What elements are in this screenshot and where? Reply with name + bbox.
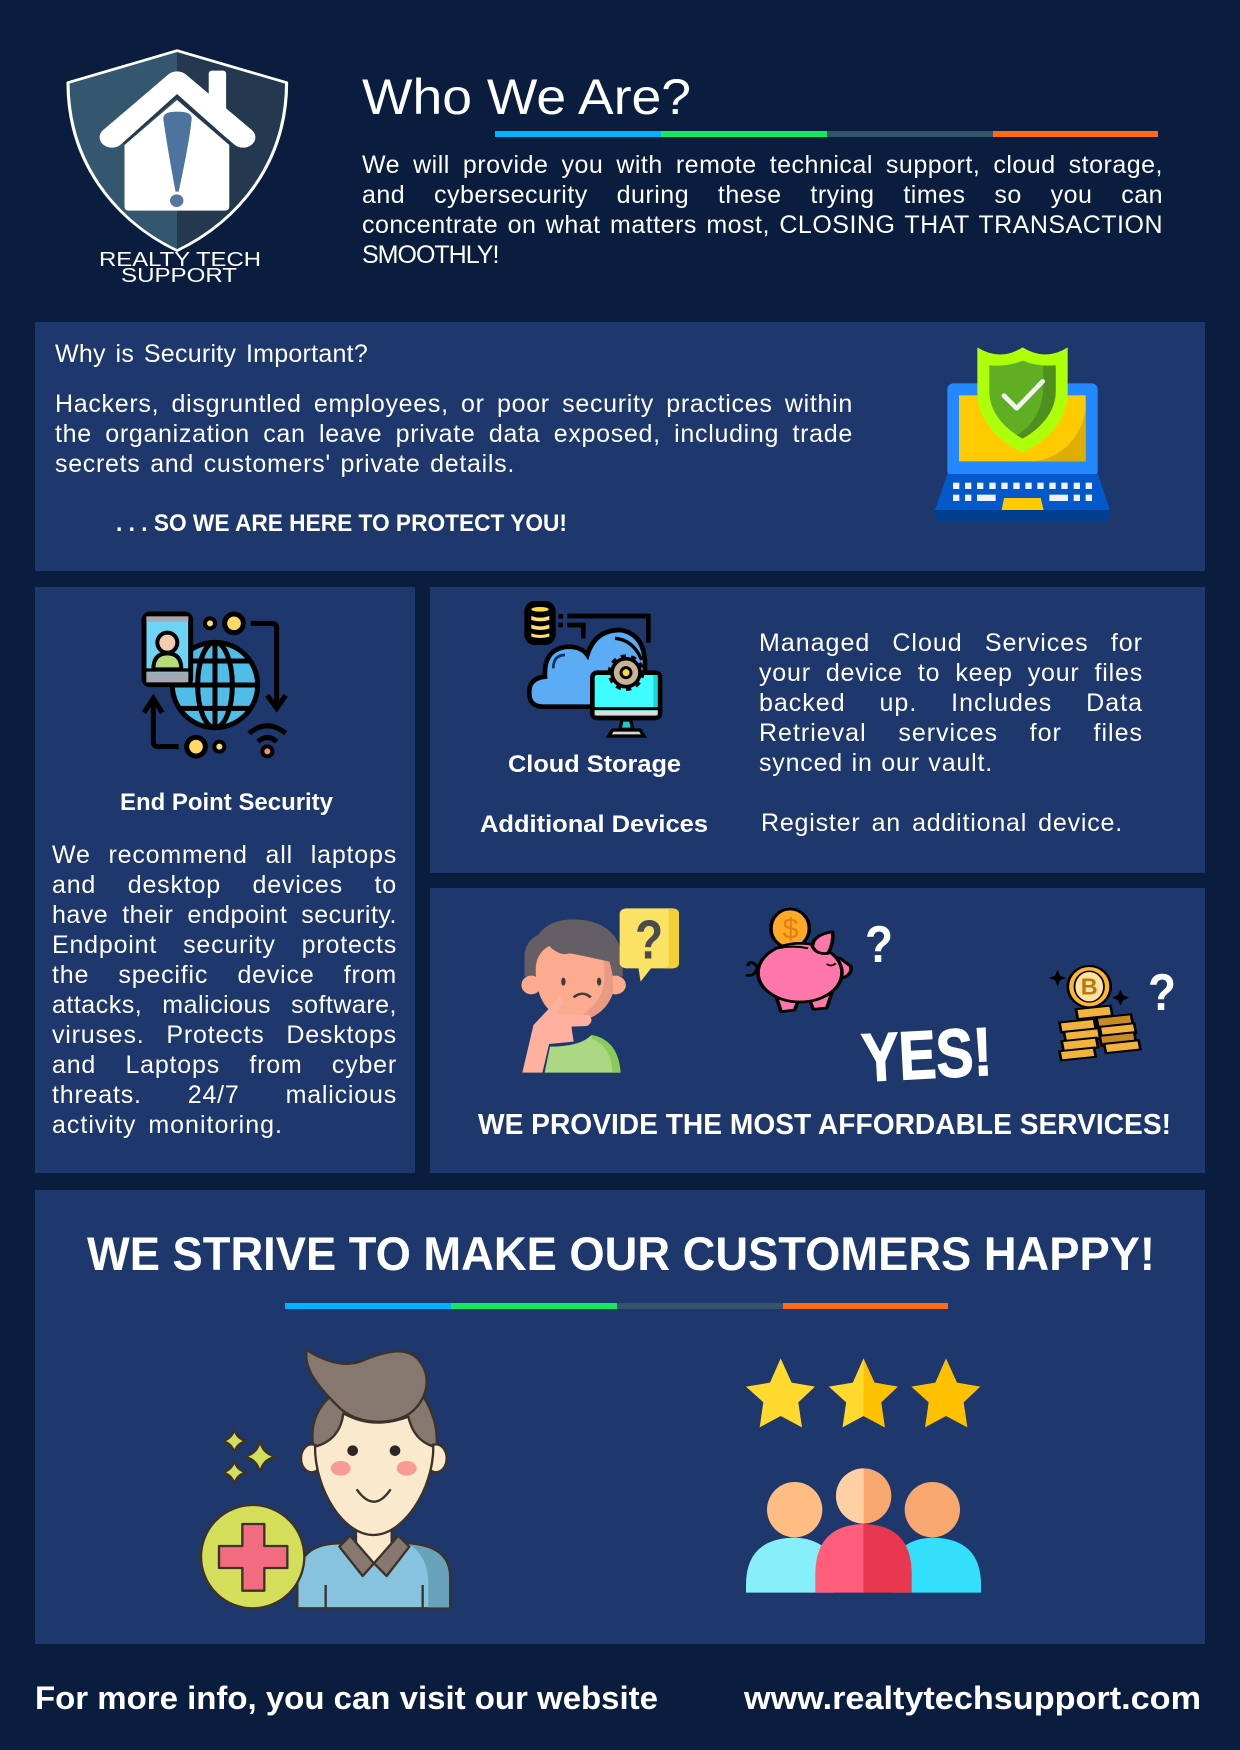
icon: bitcoin and gold bars: B xyxy=(1081,974,1098,1000)
end point security text block xyxy=(52,841,397,1139)
end point security text block: threats. 24/7 malicious xyxy=(52,1081,397,1109)
footer xyxy=(35,1680,1201,1716)
security text block: the organization can leave private data exposed, including trade xyxy=(55,420,853,448)
icon: happy man with medical badge xyxy=(201,1350,450,1608)
logo: realty tech support shield: REALTY TECH xyxy=(99,249,261,271)
end point security text block: We recommend all laptops xyxy=(52,841,397,869)
question mark: piggy bank: ? xyxy=(865,916,893,974)
colour divider bar xyxy=(495,131,1158,137)
intro text block xyxy=(362,151,1163,269)
heading: why is security important: Why is Security Important? xyxy=(55,340,368,368)
intro text block: concentrate on what matters most, CLOSING THAT TRANSACTION xyxy=(362,211,1163,239)
heading: additional devices: Additional Devices xyxy=(480,811,708,838)
icon: laptop with shield xyxy=(935,347,1110,521)
footer text: website url: www.realtytechsupport.com xyxy=(743,1680,1201,1716)
icon: cloud storage xyxy=(527,603,660,736)
end point security text block: Endpoint security protects xyxy=(52,931,397,959)
cloud storage text block: your device to keep your files xyxy=(759,659,1143,687)
logo: realty tech support shield: SUPPORT xyxy=(121,265,237,287)
additional devices text: Register an additional device. xyxy=(761,809,1123,837)
icon: bitcoin and gold bars xyxy=(1050,966,1140,1060)
cloud storage text block xyxy=(759,629,1143,777)
heading: end point security: End Point Security xyxy=(120,789,334,816)
icon: piggy bank with coin xyxy=(746,909,851,1012)
panel: end point security xyxy=(35,587,415,1173)
colour divider bar xyxy=(285,1303,948,1309)
callout: most affordable services: WE PROVIDE THE MOST AFFORDABLE SERVICES! xyxy=(478,1109,1171,1141)
cloud storage text block: backed up. Includes Data xyxy=(759,689,1143,717)
title: who we are: Who We Are? xyxy=(362,69,691,125)
icon: thinking person: ? xyxy=(635,908,663,970)
end point security text block: the specific device from xyxy=(52,961,397,989)
callout: yes: YES! xyxy=(860,1014,994,1096)
end point security text block: and Laptops from cyber xyxy=(52,1051,397,1079)
callout: so we are here to protect you: . . . SO WE ARE HERE TO PROTECT YOU! xyxy=(116,510,567,537)
icon: endpoint globe and phone xyxy=(144,614,286,756)
end point security text block: activity monitoring. xyxy=(52,1111,283,1139)
question mark: bitcoin: ? xyxy=(1148,964,1176,1022)
end point security text block: attacks, malicious software, xyxy=(52,991,397,1019)
intro text block: We will provide you with remote technical support, cloud storage, xyxy=(362,151,1163,179)
icon: thinking person xyxy=(521,908,679,1073)
footer text: more info: For more info, you can visit our website xyxy=(35,1680,658,1716)
heading: cloud storage: Cloud Storage xyxy=(508,751,681,778)
end point security text block: have their endpoint security. xyxy=(52,901,397,929)
cloud storage text block: Managed Cloud Services for xyxy=(759,629,1143,657)
panel: why is security important xyxy=(35,322,1205,571)
cloud storage text block: Retrieval services for files xyxy=(759,719,1143,747)
security text block: secrets and customers' private details. xyxy=(55,450,515,478)
cloud storage text block: synced in our vault. xyxy=(759,749,993,777)
security text block xyxy=(55,390,853,478)
panel: affordable services xyxy=(430,888,1205,1173)
icon: piggy bank with coin: $ xyxy=(783,914,799,946)
intro text block: and cybersecurity during these trying times so you can xyxy=(362,181,1163,209)
logo: realty tech support shield xyxy=(68,51,287,287)
end point security text block: and desktop devices to xyxy=(52,871,397,899)
icon: three stars and customers xyxy=(746,1358,981,1593)
panel: happy customers xyxy=(35,1190,1205,1644)
heading: we strive to make our customers happy: WE STRIVE TO MAKE OUR CUSTOMERS HAPPY! xyxy=(87,1227,1155,1280)
intro text block: SMOOTHLY! xyxy=(362,241,498,269)
header section xyxy=(66,49,1163,287)
security text block: Hackers, disgruntled employees, or poor security practices within xyxy=(55,390,853,418)
end point security text block: viruses. Protects Desktops xyxy=(52,1021,397,1049)
panel: cloud storage xyxy=(430,587,1205,873)
